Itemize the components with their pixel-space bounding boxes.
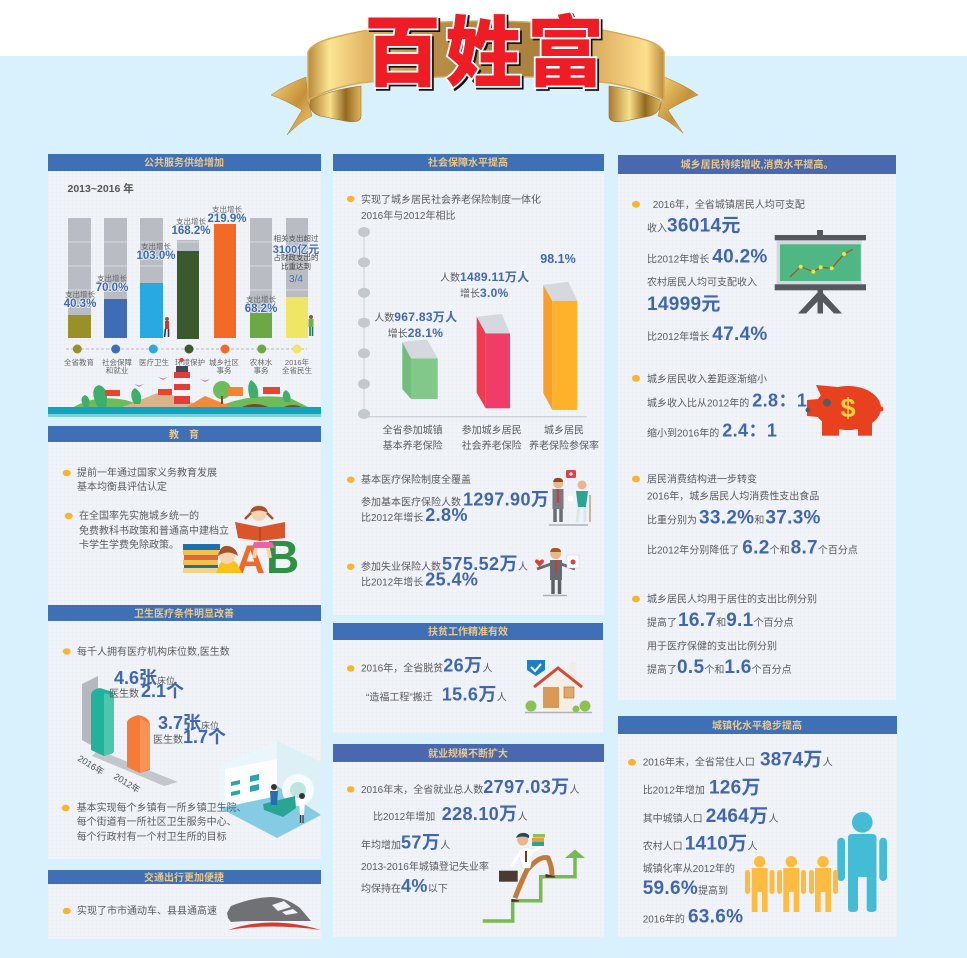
heading bbox=[333, 154, 604, 171]
legend: 事务 bbox=[254, 365, 269, 375]
bar value labels: 68.2% bbox=[245, 303, 277, 315]
value label: urban pension: 人数967.83万人 bbox=[374, 310, 457, 324]
icon: high-speed train bbox=[227, 897, 321, 930]
period label: 2013~2016 年 bbox=[68, 182, 134, 195]
axis labels: 全省参加城镇 bbox=[383, 424, 443, 437]
bullet text bbox=[347, 777, 580, 896]
legend: 社会保障 bbox=[102, 357, 132, 367]
panel: social security bbox=[333, 154, 604, 615]
bullet text: 实现了城乡居民社会养老保险制度一体化 bbox=[361, 193, 541, 206]
axis labels: 城乡居民 bbox=[544, 425, 584, 437]
legend: 和就业 bbox=[106, 365, 129, 375]
icon: orange people bbox=[745, 856, 838, 912]
bullet text 1 bbox=[63, 466, 217, 493]
bullet text: income figures: 比2012年增长40.2% bbox=[647, 247, 768, 268]
bar value labels: 支出增长 bbox=[246, 294, 276, 304]
bullet text: 2016年与2012年相比 bbox=[361, 209, 456, 222]
bullet text: unemployment insurance bbox=[347, 554, 528, 590]
icon: house bbox=[525, 660, 592, 712]
bar value labels: 支出增长 bbox=[212, 204, 242, 214]
bar value labels: 3/4 bbox=[289, 274, 303, 285]
bullet text: unemployment insurance: 比2012年增长25.4% bbox=[361, 570, 478, 590]
heading: 城镇化水平稳步提高 bbox=[712, 719, 802, 732]
illustration: hospital room bbox=[220, 741, 321, 838]
panel: income bbox=[618, 155, 896, 700]
value labels 2016: 医生数2.1个 bbox=[109, 681, 184, 701]
bullet text 2: 卡学生学费免除政策。 bbox=[79, 538, 179, 551]
bullet text: income gap: 城乡收入比从2012年的2.8：1 bbox=[647, 391, 807, 411]
heading: 就业规模不断扩大 bbox=[428, 747, 508, 760]
illustration: doctor and patient bbox=[549, 470, 590, 525]
bullet text: 比2012年增加 bbox=[373, 812, 435, 823]
panel: education bbox=[48, 426, 321, 605]
title: 百姓富: 百 bbox=[366, 13, 443, 99]
title: 百姓富: 富 bbox=[527, 11, 604, 97]
bar value labels: 相关支出超过 bbox=[274, 233, 319, 243]
icon: piggy bank bbox=[806, 385, 884, 436]
bullet text: income figures: 收入36014元 bbox=[647, 216, 741, 237]
illustration: children reading: A bbox=[236, 538, 265, 582]
bar value labels: 比重达到 bbox=[281, 261, 311, 271]
bullet text: income gap: 城乡居民收入差距逐渐缩小 bbox=[647, 372, 767, 385]
icon: gold ribbon bbox=[271, 21, 698, 135]
value label: social pension: 人数1489.11万人 bbox=[440, 270, 529, 284]
heading bbox=[48, 870, 321, 884]
bullet text: 实现了市市通动车、县县通高速 bbox=[77, 904, 217, 917]
heading: 教 育 bbox=[169, 428, 199, 441]
heading: 扶贫工作精准有效 bbox=[428, 625, 508, 638]
axis labels: 基本养老保险 bbox=[383, 439, 443, 452]
3D bar chart: 2016年 bbox=[76, 752, 106, 777]
bullet text: 均保持在4%以下 bbox=[361, 876, 448, 896]
landscape illustration bbox=[48, 358, 321, 417]
title: 百姓富: 富 bbox=[529, 13, 606, 99]
bullet text: 比2012年增加126万 bbox=[643, 777, 761, 798]
value label: 98.1%: 98.1% bbox=[540, 252, 576, 266]
bar value labels: 103.0% bbox=[136, 250, 176, 262]
axis labels: 参加城乡居民 bbox=[462, 424, 522, 437]
bullet text: medical insurance bbox=[347, 473, 549, 525]
bullet text: 城镇化率从2012年的 bbox=[643, 862, 735, 875]
bullet text 2: 在全国率先实施城乡统一的 bbox=[79, 509, 199, 522]
heading: 卫生医疗条件明显改善 bbox=[134, 607, 234, 620]
bullet text bbox=[347, 656, 507, 705]
panel: healthcare bbox=[48, 605, 321, 859]
value labels 2012: 医生数1.7个 bbox=[153, 727, 226, 747]
bullet text: consumption: 2016年，城乡居民人均消费性支出食品 bbox=[647, 489, 819, 502]
bar value labels: 70.0% bbox=[96, 282, 128, 294]
bullet text: income figures: 比2012年增长47.4% bbox=[647, 324, 768, 345]
bullet text: consumption: 居民消费结构进一步转变 bbox=[647, 473, 757, 486]
bullet text: medical insurance: 参加基本医疗保险人数1297.90万 bbox=[361, 490, 549, 510]
value label: social pension: 增长3.0% bbox=[460, 286, 509, 300]
legend: 农林水 bbox=[250, 357, 273, 367]
legend: 全省民生 bbox=[282, 365, 312, 375]
bar value labels: 支出增长 bbox=[141, 241, 171, 251]
heading: 交通出行更加便捷 bbox=[144, 871, 224, 884]
bar value labels: 占财政支出的 bbox=[274, 252, 318, 262]
3D bar chart bbox=[358, 227, 587, 419]
bullet text: 2016年的63.6% bbox=[643, 906, 743, 927]
title: 百姓富 bbox=[364, 11, 606, 99]
value label: social pension bbox=[440, 270, 529, 300]
value labels 2016 bbox=[109, 668, 184, 701]
title: 百姓富: 姓 bbox=[447, 13, 524, 99]
legend: 全省教育 bbox=[64, 357, 94, 367]
bullet text: 基本实现每个乡镇有一所乡镇卫生院、 bbox=[77, 801, 247, 814]
icon: presentation chart bbox=[775, 230, 866, 314]
illustration: man climbing stairs bbox=[483, 833, 585, 921]
heading bbox=[48, 426, 321, 442]
bar value labels bbox=[64, 204, 319, 315]
bullet text: housing and healthcare spending: 用于医疗保健的支出比例分别 bbox=[647, 640, 777, 653]
legend: 环境保护 bbox=[175, 357, 205, 367]
legend: 医疗卫生 bbox=[139, 357, 169, 367]
bullet text bbox=[628, 750, 833, 927]
bullet text: income gap bbox=[632, 372, 807, 441]
bar value labels: 支出增长 bbox=[65, 289, 95, 299]
axis labels: 社会养老保险 bbox=[462, 439, 522, 452]
bullet text: 2016年末，全省就业总人数2797.03万人 bbox=[361, 777, 580, 797]
bullet text: consumption: 比2012年分别降低了6.2个和8.7个百分点 bbox=[647, 538, 858, 559]
heading: 社会保障水平提高 bbox=[428, 156, 508, 169]
bullet text: housing and healthcare spending: 城乡居民人均用于居住的支出比例分别 bbox=[647, 593, 817, 606]
title: 百姓富: 姓 bbox=[445, 11, 522, 97]
bullet text: 228.10万 bbox=[442, 804, 518, 824]
value labels 2012 bbox=[153, 713, 226, 747]
title: 百姓富: 百 bbox=[364, 11, 441, 97]
legend: 事务 bbox=[216, 365, 232, 375]
heading bbox=[48, 154, 321, 171]
bullet text 2 bbox=[65, 509, 229, 551]
axis labels: 养老保险参保率 bbox=[529, 439, 599, 452]
heading bbox=[48, 605, 321, 621]
bar value labels: 168.2% bbox=[171, 225, 211, 237]
bullet text: 2016年末，全省常住人口 3874万人 bbox=[643, 750, 833, 771]
heading bbox=[333, 744, 604, 762]
bullet text: 人 bbox=[497, 693, 507, 704]
bullet text: 其中城镇人口2464万人 bbox=[643, 806, 778, 827]
bullet text: medical insurance: 基本医疗保险制度全覆盖 bbox=[361, 473, 471, 486]
heading bbox=[618, 716, 897, 734]
bullet text: 2013-2016年城镇登记失业率 bbox=[361, 860, 489, 873]
bar chart bbox=[68, 218, 308, 339]
bullet text: consumption bbox=[632, 473, 858, 559]
illustration: man with heart and document bbox=[535, 548, 579, 596]
panel: poverty relief bbox=[333, 623, 603, 733]
bullet text 1: 提前一年通过国家义务教育发展 bbox=[77, 466, 217, 479]
bar value labels: 支出增长 bbox=[97, 273, 127, 283]
bar value labels: 3100亿元 bbox=[273, 242, 319, 256]
bar value labels: 40.3% bbox=[64, 298, 96, 310]
bullet text: housing and healthcare spending: 提高了0.5个和1.6个百分点 bbox=[647, 657, 792, 678]
legend: 2016年 bbox=[285, 357, 310, 367]
heading: 城乡居民持续增收,消费水平提高。 bbox=[681, 158, 833, 171]
legend: 城乡社区 bbox=[209, 357, 239, 367]
bar value labels: 219.9% bbox=[207, 213, 247, 225]
bullet text: medical insurance: 比2012年增长2.8% bbox=[361, 505, 468, 525]
bullet text: “造福工程”搬迁 bbox=[366, 693, 433, 704]
bullet text: 人 bbox=[518, 812, 528, 823]
bullet text bbox=[62, 801, 247, 843]
value labels 2012: 3.7张床位 bbox=[158, 713, 219, 733]
value label: urban pension: 增长28.1% bbox=[388, 326, 443, 340]
bullet text: income figures: 农村居民人均可支配收入 bbox=[647, 276, 757, 289]
bullet text bbox=[347, 193, 541, 222]
axis labels bbox=[383, 424, 599, 452]
figures bbox=[164, 315, 314, 337]
illustration: children reading: B bbox=[266, 531, 299, 583]
panel: transport bbox=[48, 870, 321, 939]
heading bbox=[333, 623, 603, 640]
heading bbox=[618, 155, 896, 174]
bullet text 1: 基本均衡县评估认定 bbox=[77, 480, 167, 493]
bullet text: income figures: 14999元 bbox=[647, 294, 721, 315]
legend bbox=[64, 344, 312, 375]
value label: urban pension bbox=[374, 310, 457, 340]
bullet text: income gap: 缩小到2016年的2.4：1 bbox=[647, 421, 777, 441]
panel: public services bbox=[48, 154, 321, 417]
bullet text: 每个行政村有一个村卫生所的目标 bbox=[77, 830, 227, 843]
bullet text 2: 免费教科书政策和普通高中建档立 bbox=[79, 524, 229, 537]
panel: employment bbox=[333, 744, 604, 937]
illustration: children reading bbox=[183, 505, 299, 583]
bullet text: housing and healthcare spending: 提高了16.7和9.1个百分点 bbox=[647, 610, 794, 631]
bullet text: 年均增加57万人 bbox=[361, 833, 450, 853]
bullet text: unemployment insurance: 参加失业保险人数575.52万人 bbox=[361, 554, 528, 574]
3D bar chart: 2012年 bbox=[112, 770, 142, 795]
bullet text: 每个街道有一所社区卫生服务中心、 bbox=[77, 815, 237, 828]
3D bar chart bbox=[76, 676, 178, 795]
bar value labels: 支出增长 bbox=[176, 216, 206, 226]
bullet text: income figures: 2016年，全省城镇居民人均可支配 bbox=[653, 198, 805, 211]
bullet text: 15.6万 bbox=[442, 685, 497, 705]
bullet text: 农村人口1410万人 bbox=[643, 834, 757, 855]
icon: large blue person bbox=[837, 812, 887, 912]
bullet text: 59.6%提高到 bbox=[643, 878, 728, 899]
bullet text: 每千人拥有医疗机构床位数,医生数 bbox=[77, 645, 230, 658]
bullet text: 2016年，全省脱贫26万人 bbox=[361, 656, 492, 676]
title banner bbox=[271, 11, 698, 135]
value labels 2016: 4.6张床位 bbox=[114, 668, 175, 688]
bullet text: consumption: 比重分别为33.2%和37.3% bbox=[647, 507, 821, 528]
bullet text: income figures bbox=[632, 198, 805, 345]
heading: 公共服务供给增加 bbox=[144, 156, 224, 169]
icon: piggy bank: $ bbox=[840, 393, 856, 423]
bullet text: housing and healthcare spending bbox=[632, 593, 817, 678]
panel: urbanization bbox=[618, 716, 897, 937]
